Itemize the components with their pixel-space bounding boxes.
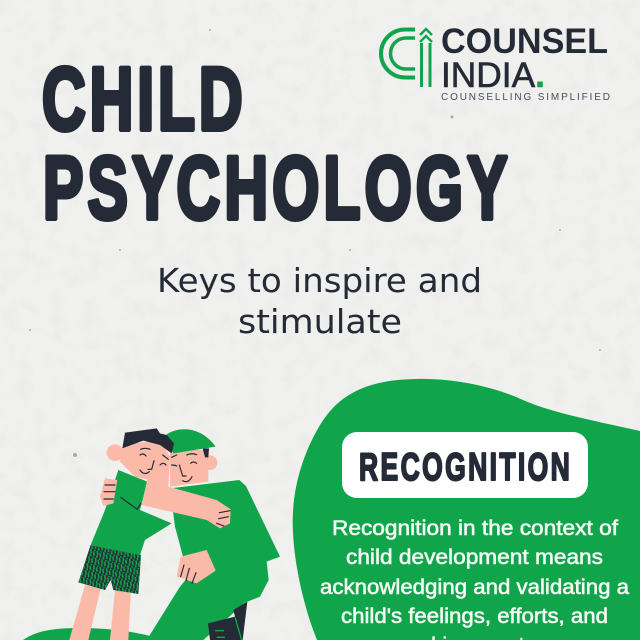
facial and finger lines — [104, 448, 230, 583]
green panel: recognition — [293, 379, 640, 640]
illustration: man hugging boy — [23, 428, 280, 640]
subtitle — [157, 261, 482, 341]
boy hair — [122, 428, 174, 453]
man head — [170, 450, 208, 487]
man ear — [203, 455, 217, 470]
boy ear — [107, 444, 123, 461]
heading pill — [342, 432, 588, 498]
body text: acknowledging and validating a — [320, 576, 629, 599]
logo wordmark: COUNSEL — [441, 22, 608, 61]
ground shape — [23, 628, 150, 640]
body text — [320, 517, 629, 640]
boy legs — [69, 585, 131, 640]
man cap — [166, 429, 216, 453]
logo wordmark second line: INDIA. — [441, 56, 545, 95]
title: psychology: PSYCHOLOGY — [43, 139, 507, 238]
boy shirt — [91, 470, 172, 555]
man hand on hip — [177, 550, 216, 583]
boy head and arm — [120, 440, 231, 528]
title: child: CHILD — [42, 50, 243, 149]
man hair — [203, 448, 209, 457]
man body — [147, 480, 280, 640]
logo tagline: COUNSELLING SIMPLIFIED — [441, 92, 610, 103]
logo: Counsel India — [381, 22, 610, 103]
man trousers — [208, 602, 247, 640]
heading: RECOGNITION — [359, 446, 570, 489]
subtitle: Keys to inspire and — [157, 261, 482, 300]
body text: child's feelings, efforts, and — [341, 605, 608, 628]
man hand on back — [100, 478, 117, 506]
subtitle: stimulate — [238, 302, 402, 341]
boy shorts — [78, 545, 141, 594]
body text: child development means — [346, 546, 603, 569]
panel blob — [293, 379, 640, 640]
logo icon — [381, 29, 432, 87]
body text: Recognition in the context of — [332, 517, 618, 540]
